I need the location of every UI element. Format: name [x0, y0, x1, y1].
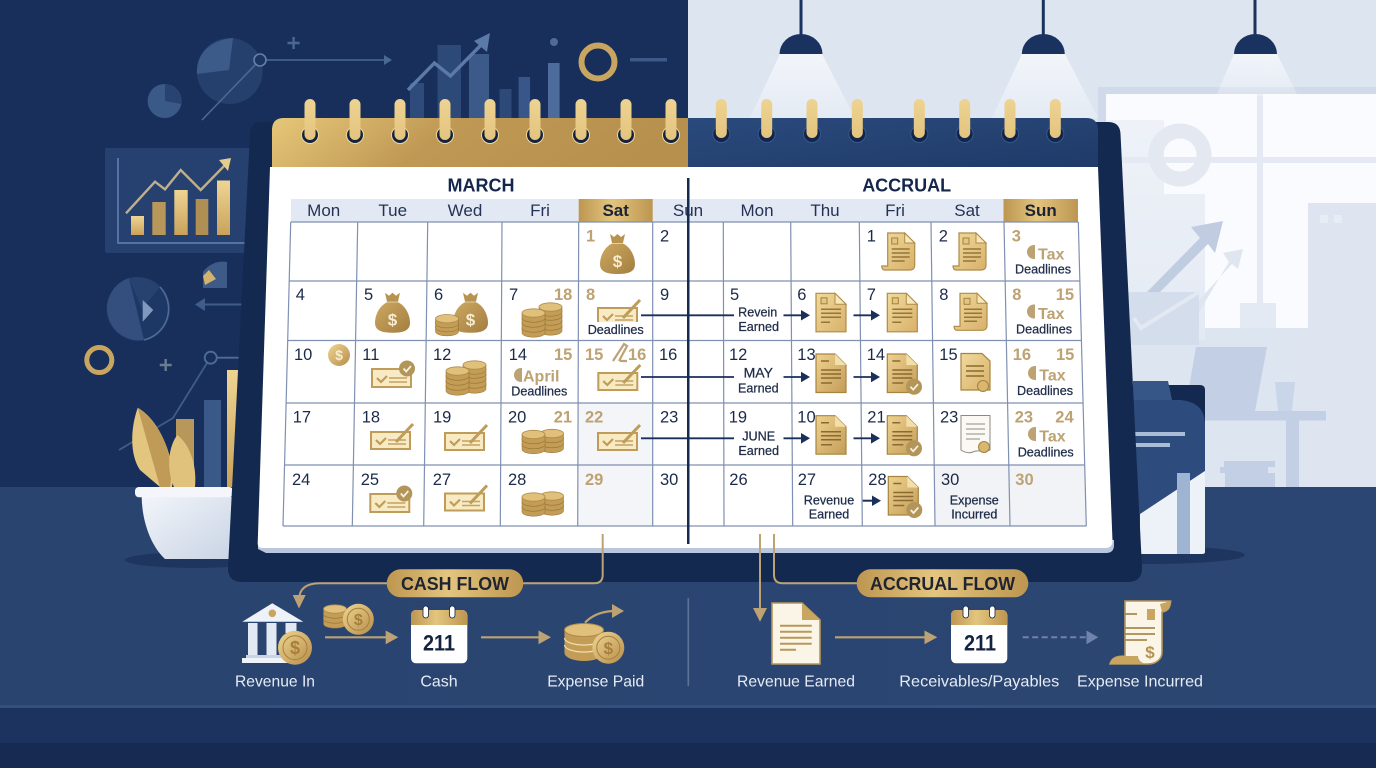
cash side: day numbers: 15 [554, 346, 572, 364]
lamp 2 [992, 0, 1098, 118]
accrual side: day numbers: 15 [939, 346, 958, 364]
icon: bank with coin: $ [290, 638, 300, 658]
weekday header band: Sat [954, 201, 980, 220]
tax deadlines column: Tax [1039, 368, 1066, 385]
icon: calendar accrual: 211 [964, 631, 996, 656]
tax deadlines column: Tax [1038, 246, 1064, 263]
labels: revenue earned cells: Earned [809, 508, 849, 522]
icon: calendar accrual [951, 606, 1007, 663]
cash side: day numbers: 5 [364, 286, 373, 304]
icon: calendar cash [411, 606, 467, 663]
sheet shadow [258, 540, 1114, 553]
plant shadow [125, 552, 265, 568]
labels: revenue earned cells: JUNE [742, 430, 775, 444]
icon: coin stack day 12 [446, 361, 486, 395]
cash side: day numbers: 1 [586, 228, 595, 246]
accrual side: day numbers: 15 [1056, 346, 1074, 364]
decor: plus [160, 359, 172, 371]
accrual side: day numbers: 7 [867, 286, 876, 304]
background: pale office right half [688, 0, 1376, 768]
flow divider [688, 598, 689, 686]
decor: small quadrant [203, 262, 227, 288]
accrual side: day numbers: 13 [797, 346, 816, 364]
desk front band [0, 705, 1376, 768]
center divider [687, 178, 690, 544]
accrual side: day numbers: 10 [797, 409, 816, 427]
arrow: revenue to cash [325, 630, 398, 644]
labels: revenue earned cells: Incurred [951, 508, 997, 522]
accrual side: day numbers: 3 [1012, 228, 1021, 246]
label: Cash: Cash [420, 674, 458, 691]
panel: gold line and bar chart [105, 148, 251, 253]
potted plant [132, 408, 233, 559]
April deadline note: Deadlines [511, 385, 567, 399]
binding rings: right [713, 99, 1064, 142]
cash side: day numbers: 15 [585, 346, 603, 364]
accrual flow connector arrows [753, 534, 860, 622]
folder shadow [1055, 546, 1245, 564]
connector row 3: cash to accrual [641, 372, 880, 382]
accrual side: day numbers: 30 [1015, 471, 1034, 489]
accrual side: day numbers: 2 [939, 228, 948, 246]
icon: coin stack with rising arrow: $ [604, 639, 614, 658]
icon: scroll day 2 [953, 233, 986, 270]
weekday header band: Sun [673, 201, 703, 220]
accrual side: day numbers: 8 [1012, 286, 1021, 304]
cash side: day numbers: 6 [434, 286, 443, 304]
labels: revenue earned cells: Revenue [804, 493, 854, 507]
tax deadlines column [1015, 245, 1074, 460]
label: Receivables/Payables: Receivables/Payables [899, 674, 1059, 691]
icon: expense scroll: $ [1145, 643, 1155, 662]
label: Deadlines day 8: Deadlines [588, 323, 644, 337]
icon: money bag day 1 [600, 234, 635, 274]
icon: coin stack day 28 [522, 492, 564, 516]
icon: revenue document [772, 603, 820, 664]
icon: signed check day 15 [598, 365, 640, 390]
label: Revenue In: Revenue In [235, 674, 315, 691]
cash side: day numbers: 22 [585, 409, 603, 427]
tax deadlines column: Deadlines [1017, 384, 1073, 398]
April deadline note [511, 368, 567, 399]
dashed arrow: receivables to expense [1023, 630, 1098, 644]
icon: coin day 10 [328, 344, 350, 366]
accrual side: day numbers: 26 [729, 471, 748, 489]
pill: cash flow [387, 569, 523, 597]
accrual side: day numbers: 30 [941, 471, 959, 489]
icon: check with badge day 25 [370, 486, 412, 512]
cash side: day numbers: 18 [362, 409, 380, 427]
icon: certificate day 15 [961, 354, 990, 392]
decor: line with node [119, 352, 239, 450]
decor: pie charts with connector [148, 37, 392, 120]
cash side: day numbers [292, 228, 678, 489]
icon: document day 10 [816, 416, 846, 454]
cash side: day numbers: 21 [554, 409, 572, 427]
cash side: day numbers: 27 [433, 471, 451, 489]
cash side: day numbers: 29 [585, 471, 603, 489]
background: dark navy left half [0, 0, 688, 768]
binding rings: left [302, 99, 680, 144]
icon: document day 7 [887, 293, 917, 332]
cash side: day numbers: 16 [659, 346, 677, 364]
accrual side: day numbers: 14 [867, 346, 885, 364]
decor: bars behind plant [176, 370, 238, 487]
cash side: day numbers: 20 [508, 409, 526, 427]
accrual side: day numbers: 5 [730, 286, 739, 304]
desk surface [0, 487, 1376, 705]
connector row 5 [863, 496, 881, 506]
accrual side: day numbers: 16 [1013, 346, 1031, 364]
icon: coin stack day 20 [522, 429, 564, 454]
cash side: day numbers: 25 [361, 471, 379, 489]
icon: coins above arrow: $ [354, 612, 363, 629]
background desk with laptop [1185, 347, 1326, 487]
tax deadlines column: Deadlines [1015, 262, 1071, 276]
cash side: day numbers: 23 [660, 409, 678, 427]
icon: signed check day 19 [445, 425, 487, 450]
decor: background bar chart with arrow [408, 33, 560, 119]
icon: signed check day 18 [371, 424, 413, 449]
decor: gold ring top [582, 46, 614, 78]
icon: money bag and coins day 6 [436, 293, 488, 336]
icon: approved document day 14 [887, 354, 922, 395]
calendar grid [283, 222, 1086, 526]
label: Expense Incurred: Expense Incurred [1077, 674, 1203, 691]
tax deadlines column: Tax [1038, 306, 1064, 323]
pill: accrual flow: ACCRUAL FLOW [870, 574, 1015, 594]
arrow: cash to expense [481, 630, 551, 644]
labels: revenue earned cells: Revein [738, 306, 777, 320]
connector row 4: cash to accrual [641, 433, 880, 444]
icon: check with badge day 11 [372, 360, 415, 387]
decor: left arrow [195, 298, 242, 311]
icon: approved document day 28 [888, 476, 922, 518]
decor: gold ring left [87, 348, 112, 372]
labels: revenue earned cells: Earned [738, 444, 779, 458]
icon: money bag and coins day 6: $ [466, 311, 476, 330]
label: Revenue Earned: Revenue Earned [737, 674, 855, 691]
icon: money bag day 1: $ [613, 252, 623, 271]
labels: revenue earned cells: Earned [738, 381, 779, 395]
icon: pen day 15 [613, 344, 627, 361]
labels: revenue earned cells: Earned [738, 320, 779, 334]
weekday header band: Mon [307, 201, 340, 220]
accrual side: day numbers: 28 [868, 471, 887, 489]
accrual side: day numbers: 8 [939, 286, 948, 304]
cash side: day numbers: 14 [509, 346, 527, 364]
April deadline note: April [523, 369, 559, 386]
heading: March: MARCH [448, 176, 514, 196]
cash side: day numbers: 8 [586, 286, 595, 304]
cash side: day numbers: 10 [294, 346, 312, 364]
accrual side: day numbers: 27 [798, 471, 816, 489]
cash side: day numbers: 9 [660, 286, 669, 304]
icon: coins above arrow [324, 604, 374, 635]
cash side: day numbers: 7 [509, 286, 518, 304]
icon: money bag day 5: $ [388, 311, 398, 330]
weekday header band [291, 199, 1078, 222]
background growth arrows [1128, 221, 1243, 345]
labels: revenue earned cells: Expense [950, 493, 999, 507]
weekday header band: Wed [448, 201, 482, 220]
weekday header band: Sat [602, 201, 629, 220]
cash side: day numbers: 19 [433, 409, 451, 427]
office window [1098, 87, 1376, 487]
tax deadlines column: Deadlines [1018, 446, 1074, 460]
accrual side: day numbers: 24 [1055, 409, 1074, 427]
cash side: day numbers: 24 [292, 471, 310, 489]
weekday header band: Mon [740, 201, 774, 220]
heading: Accrual: ACCRUAL [862, 176, 951, 196]
background donut chart [1156, 131, 1204, 179]
weekday header band: Fri [885, 201, 905, 220]
icon: approved document day 21 [887, 416, 922, 456]
lamp 1 [750, 0, 855, 118]
cash side: day numbers: 28 [508, 471, 526, 489]
icon: scroll day 1 [882, 233, 915, 270]
tax deadlines column: Tax [1039, 429, 1066, 446]
icon: scroll day 8 [954, 293, 987, 330]
icon: expense scroll [1110, 601, 1171, 664]
decor: short dash [630, 58, 667, 62]
icon: coin stack with rising arrow [564, 604, 624, 664]
tax deadlines column: Deadlines [1016, 322, 1072, 336]
calendar backing board [228, 122, 1142, 582]
accrual side: day numbers: 1 [867, 228, 876, 246]
icon: bank with coin [242, 603, 312, 665]
decor: pie with play marker [106, 277, 170, 341]
accrual side: day numbers: 15 [1056, 286, 1074, 304]
accrual side: day numbers: 6 [797, 286, 806, 304]
calendar page [258, 167, 1112, 548]
folder and papers [1133, 381, 1205, 554]
cash side: day numbers: 4 [296, 286, 305, 304]
calendar binding bar: accrual (navy) [688, 118, 1098, 167]
cash side: day numbers: 18 [554, 286, 572, 304]
accrual side: day numbers: 23 [940, 409, 958, 427]
cash side: day numbers: 11 [362, 346, 379, 364]
accrual side: day numbers [729, 228, 1074, 489]
weekday header band: Fri [530, 201, 550, 220]
shaded weekend cells [578, 403, 1086, 526]
arrow: earned to receivables [835, 630, 937, 644]
cash side: day numbers: 2 [660, 228, 669, 246]
weekday header band: Thu [810, 201, 840, 220]
calendar binding bar: cash (gold) [272, 118, 688, 167]
cash flow connector arrow [293, 534, 603, 608]
icon: document day 6 [816, 293, 846, 332]
icon: document day 13 [816, 354, 846, 392]
labels: revenue earned cells [738, 306, 999, 522]
icon: coin day 10: $ [335, 347, 343, 363]
weekday header band: Sun [1025, 201, 1057, 220]
cash side: day numbers: 17 [293, 409, 311, 427]
labels: revenue earned cells: MAY [744, 365, 774, 381]
icon: white certificate day 23 [961, 416, 990, 453]
cash side: day numbers: 12 [433, 346, 451, 364]
pill: cash flow: CASH FLOW [401, 574, 509, 594]
pill: accrual flow [857, 569, 1028, 597]
lamp 3 [1216, 0, 1298, 96]
accrual side: day numbers: 21 [867, 409, 886, 427]
icon: calendar cash: 211 [423, 631, 455, 656]
connector row 2: cash to accrual [641, 310, 880, 320]
icon: signed check day 8 [595, 300, 643, 327]
icon: signed check day 22 [598, 425, 640, 450]
label: Expense Paid: Expense Paid [547, 674, 644, 691]
accrual side: day numbers: 23 [1015, 409, 1033, 427]
cash side: day numbers: 30 [660, 471, 678, 489]
accrual side: day numbers: 19 [729, 409, 747, 427]
weekday header band: Tue [378, 201, 407, 220]
accrual side: day numbers: 12 [729, 346, 747, 364]
icon: signed check day 27 [445, 486, 487, 510]
icon: money bag day 5 [375, 293, 410, 333]
icon: coin stack day 7 [522, 303, 562, 337]
cash side: day numbers: 16 [628, 346, 646, 364]
